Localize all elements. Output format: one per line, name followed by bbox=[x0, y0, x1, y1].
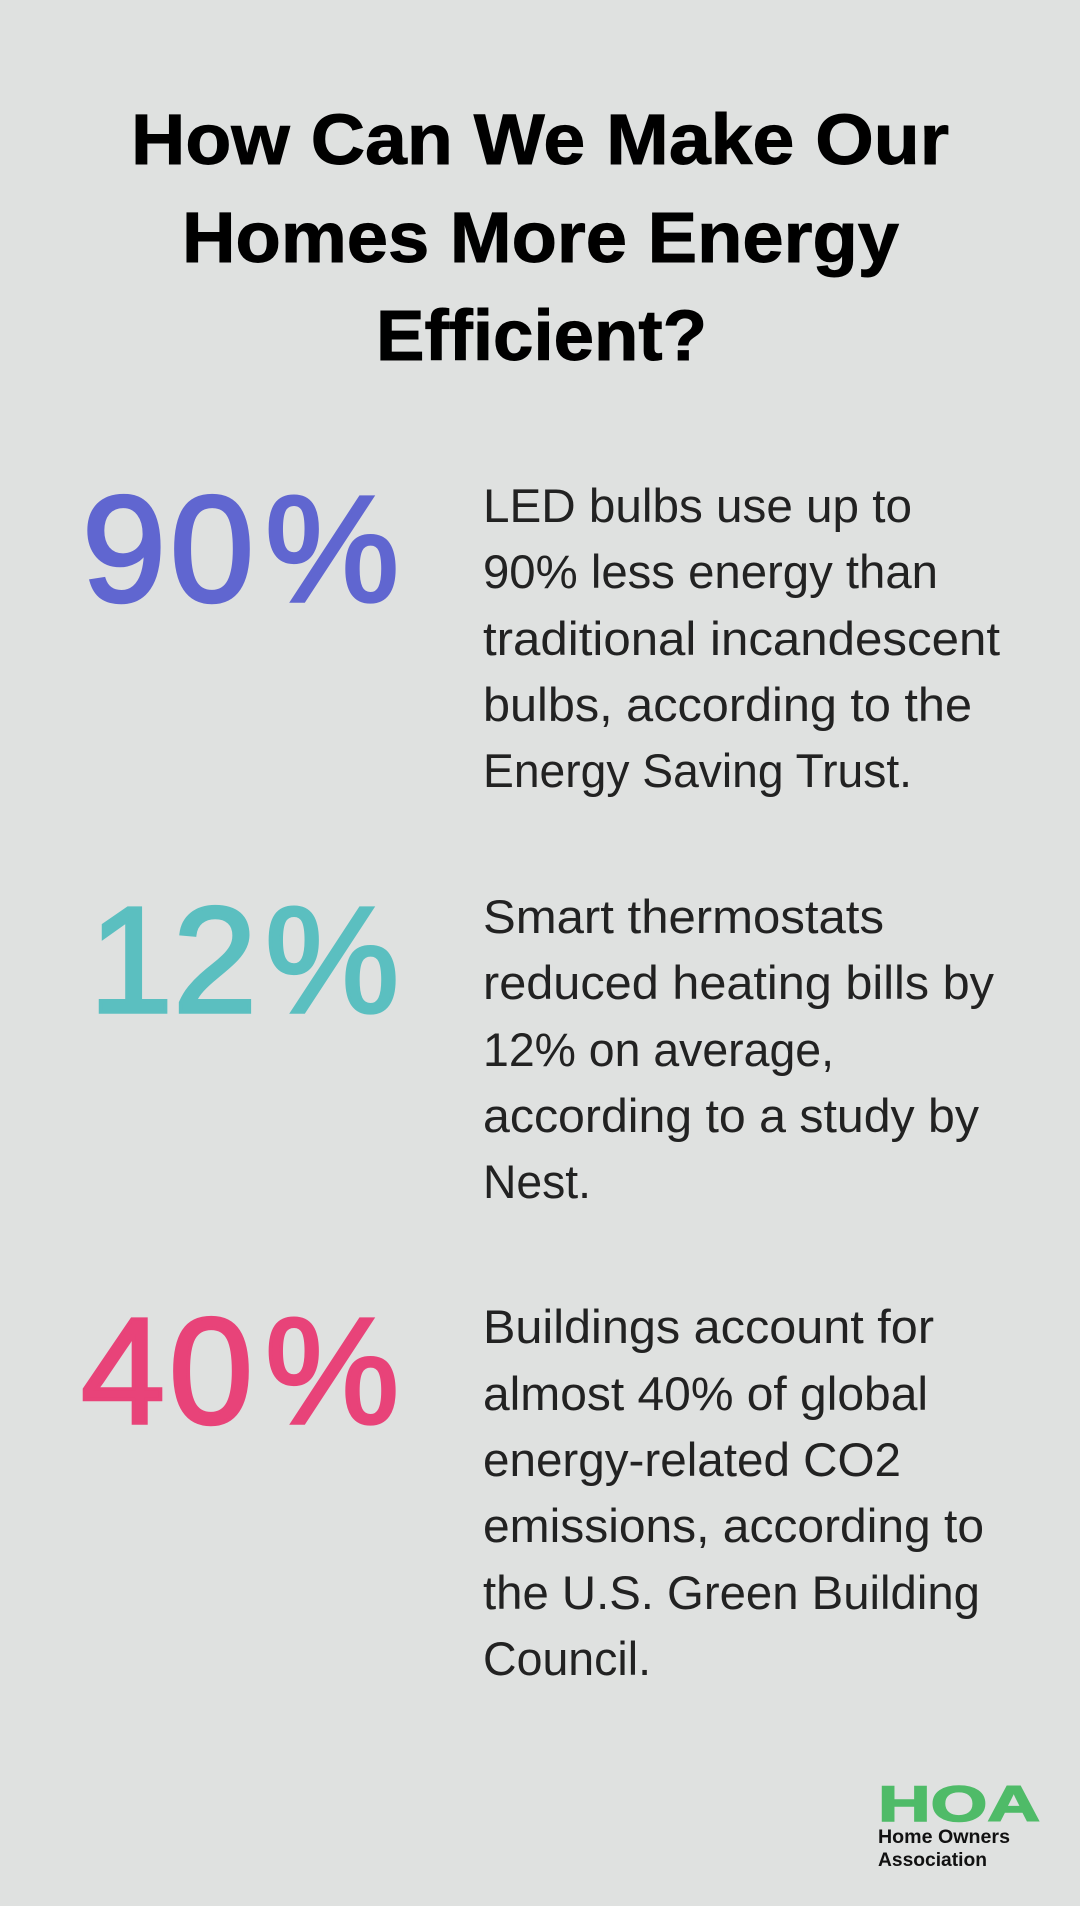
text block: buildings emissions description: Buildings account for bbox=[483, 1300, 934, 1353]
big number: 90%: 90 bbox=[82, 464, 258, 633]
text block: buildings emissions description bbox=[483, 1300, 984, 1685]
title: Efficient? bbox=[376, 297, 707, 376]
text block: smart thermostats description: Smart thermostats bbox=[483, 890, 884, 943]
text block: LED bulbs description: Energy Saving Trust. bbox=[483, 744, 912, 797]
big number: 12%: 12 bbox=[89, 875, 257, 1044]
text block: buildings emissions description: Council. bbox=[483, 1632, 651, 1685]
panel: smart thermostats statistic bbox=[89, 875, 995, 1208]
text block: smart thermostats description: reduced heating bills by bbox=[483, 956, 995, 1009]
logo: HOA Home Owners Association: Association bbox=[878, 1850, 987, 1871]
text block: smart thermostats description: 12% on average, bbox=[483, 1023, 834, 1076]
text block: buildings emissions description: energy-related CO2 bbox=[483, 1433, 901, 1486]
logo: HOA Home Owners Association: HOA bbox=[878, 1776, 1040, 1832]
text block: LED bulbs description: LED bulbs use up to bbox=[483, 479, 912, 532]
title: How Can We Make Our bbox=[131, 101, 949, 180]
text block: LED bulbs description: bulbs, according to the bbox=[483, 678, 972, 731]
logo: HOA Home Owners Association: Home Owners bbox=[878, 1827, 1010, 1848]
text block: smart thermostats description bbox=[483, 890, 995, 1208]
text block: LED bulbs description: traditional incandescent bbox=[483, 612, 1000, 665]
text block: smart thermostats description: Nest. bbox=[483, 1155, 591, 1208]
panel: LED bulbs statistic bbox=[82, 464, 1000, 797]
text block: buildings emissions description: almost 40% of global bbox=[483, 1367, 928, 1420]
big number: 12%: % bbox=[265, 875, 399, 1044]
text block: smart thermostats description: according to a study by bbox=[483, 1089, 980, 1142]
title: Homes More Energy bbox=[182, 199, 900, 278]
big number: 40%: 40 bbox=[81, 1286, 257, 1455]
text block: buildings emissions description: emissions, according to bbox=[483, 1499, 984, 1552]
big number: 90%: % bbox=[265, 464, 399, 633]
title bbox=[131, 101, 949, 376]
big number: 40%: % bbox=[265, 1286, 399, 1455]
panel: buildings emissions statistic bbox=[81, 1286, 984, 1685]
text block: LED bulbs description bbox=[483, 479, 1000, 797]
text block: LED bulbs description: 90% less energy than bbox=[483, 545, 938, 598]
text block: buildings emissions description: the U.S. Green Building bbox=[483, 1566, 980, 1619]
logo: HOA Home Owners Association bbox=[878, 1776, 1040, 1871]
